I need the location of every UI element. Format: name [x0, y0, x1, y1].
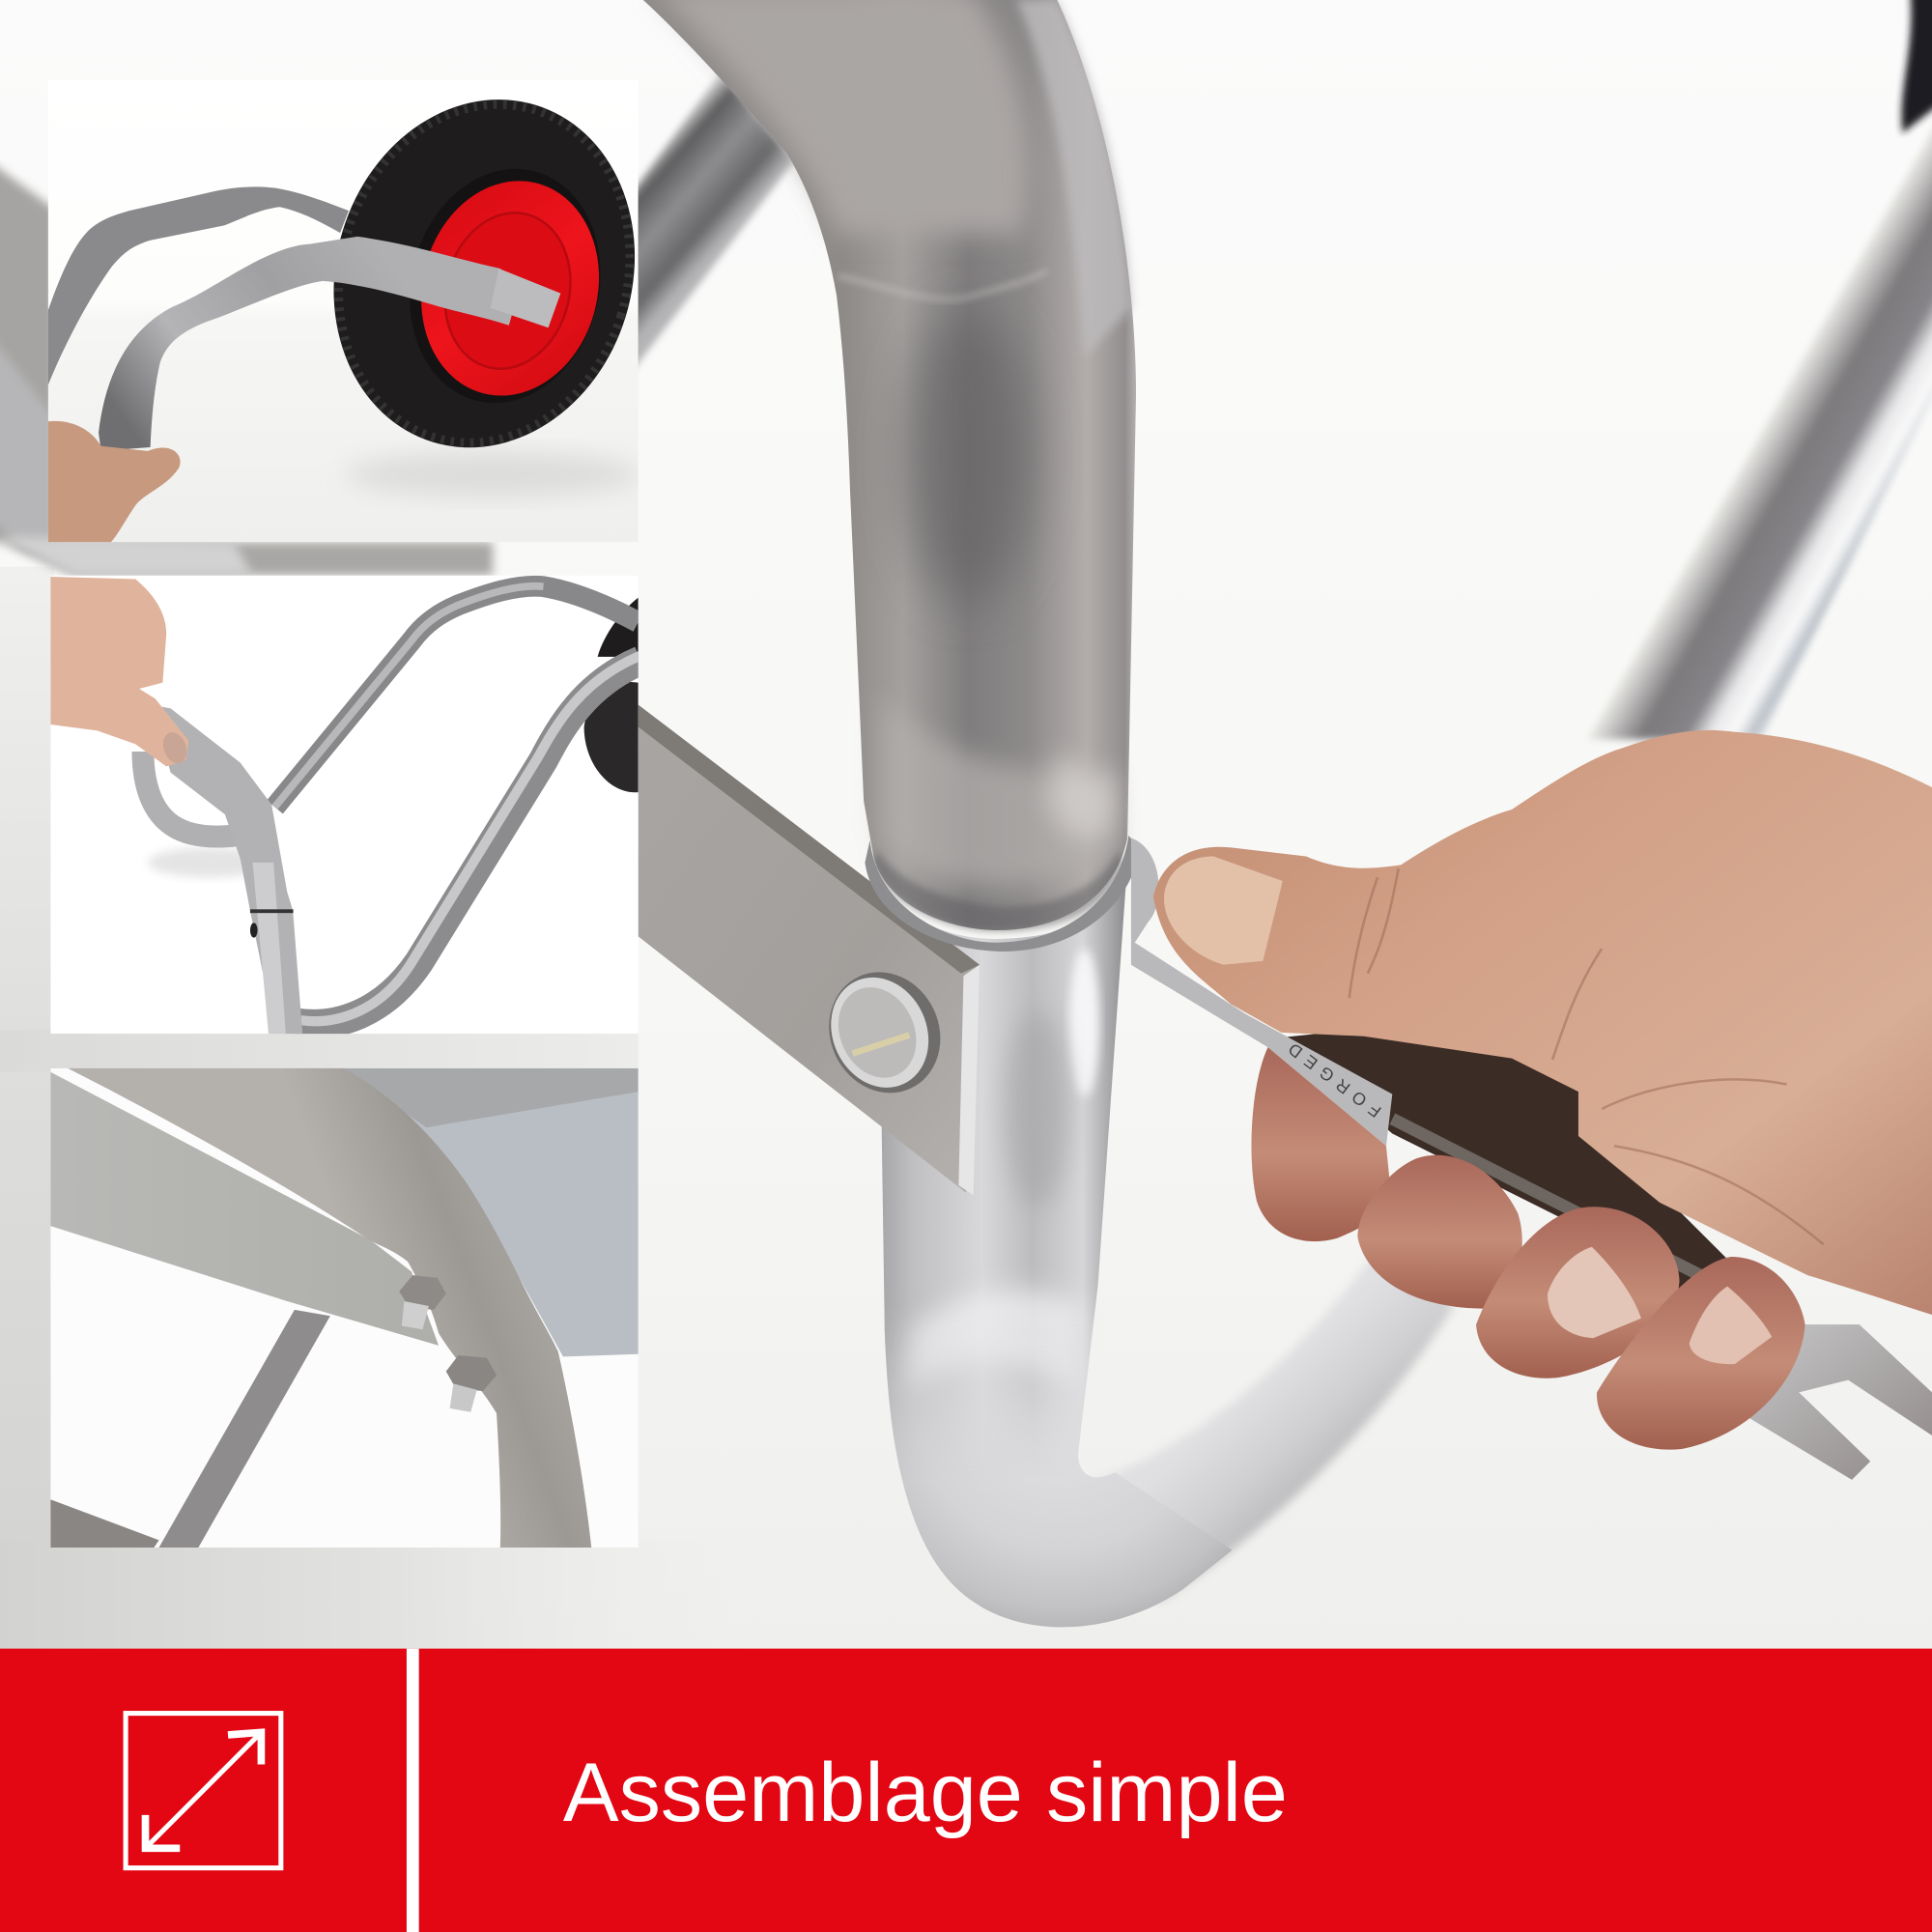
fingernail: little finger: [1690, 1287, 1772, 1364]
tub: [341, 1068, 639, 1356]
flat bar: [50, 1072, 439, 1346]
separator: [407, 1649, 419, 1932]
main tube: lower sleeve: [876, 863, 1127, 1479]
frame tube: [66, 1067, 591, 1548]
axle end: [491, 269, 560, 327]
hand holding the wrench: [1153, 730, 1932, 1450]
thumbnail: [1164, 856, 1283, 965]
flat steel bracket: [639, 705, 980, 1195]
finger: ring: [1476, 1207, 1680, 1378]
panel: handle photo: [50, 576, 640, 1035]
icon: square with double diagonal arrow: [126, 1714, 281, 1868]
finger: little: [1597, 1257, 1805, 1450]
front tube: [296, 656, 640, 1024]
front handle tube: [99, 237, 518, 451]
panel: wheel photo: [48, 99, 639, 543]
slotted bolt head: [810, 953, 960, 1111]
finger: index: [1251, 1047, 1390, 1241]
panel: bolts photo: [50, 1067, 639, 1548]
collar ring: [865, 836, 1140, 952]
upright tube with handle: [152, 705, 302, 1035]
main tube: upper section: [643, 0, 1136, 931]
wrench engraving: FORGED: [1285, 1039, 1385, 1122]
finger: middle: [1357, 1155, 1522, 1309]
band: red background: [0, 1649, 1932, 1932]
hand on handle: [48, 421, 181, 542]
footer band: [0, 1649, 1932, 1932]
wheel edge: [584, 598, 639, 792]
back handle tube: [46, 186, 349, 388]
red wheel rim: [421, 181, 599, 396]
cross rod: [159, 1310, 330, 1548]
rear tube: [274, 586, 639, 807]
tyre: [334, 99, 636, 448]
bolt: upper: [399, 1275, 446, 1329]
main tube: lower bend: [885, 1282, 1233, 1627]
fingernail: ring finger: [1548, 1247, 1641, 1338]
bolt: lower: [446, 1355, 497, 1412]
handle loop: [143, 752, 237, 837]
hand: [50, 577, 191, 767]
heading: Assemblage simple: [563, 1746, 1288, 1839]
palm and thumb: [1153, 730, 1932, 1315]
wrench: [1131, 838, 1932, 1480]
